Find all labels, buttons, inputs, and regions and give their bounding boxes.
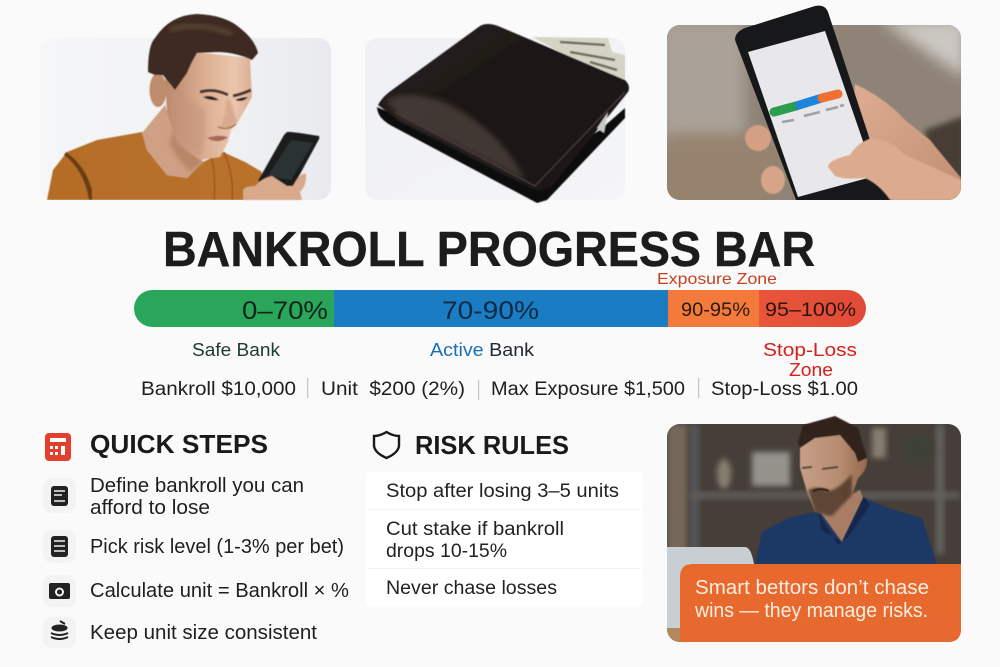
panel: risk rules list bbox=[366, 472, 643, 606]
callout: smart bettors: Smart bettors don’t chase bbox=[695, 577, 929, 599]
label: stop-loss zone: Stop-Loss bbox=[763, 340, 857, 360]
ear bbox=[150, 73, 166, 107]
step 2 bbox=[43, 530, 344, 563]
laptop bbox=[667, 547, 754, 628]
stats row: Bankroll $10,000 bbox=[141, 379, 296, 400]
neck bbox=[142, 105, 203, 178]
fingers and thumb bbox=[745, 125, 961, 200]
stats row: Unit $200 (2%) bbox=[321, 379, 465, 400]
photo: hand holding phone showing progress bar bbox=[660, 6, 965, 205]
step 3: Calculate unit = Bankroll × % bbox=[90, 580, 349, 602]
step 4: Keep unit size consistent bbox=[90, 622, 317, 644]
head of man at laptop bbox=[798, 416, 867, 516]
callout: smart bettors: wins — they manage risks. bbox=[694, 600, 928, 622]
segment: 70-90%: 70-90% bbox=[442, 297, 539, 325]
label: stop-loss zone: Zone bbox=[789, 360, 833, 380]
stats row bbox=[141, 378, 858, 400]
shirt bbox=[755, 497, 937, 564]
title: BANKROLL PROGRESS BAR bbox=[163, 223, 815, 277]
photo: man frowning at phone bbox=[40, 14, 331, 200]
rule 1: Stop after losing 3–5 units bbox=[386, 481, 619, 502]
phone in hand bbox=[243, 132, 319, 200]
photo: black leather wallet with cash bbox=[365, 24, 629, 203]
step 3 bbox=[43, 575, 349, 607]
hair bbox=[148, 14, 258, 90]
mini progress bar bbox=[774, 94, 844, 122]
icon: red calculator bbox=[45, 433, 71, 461]
hand behind phone bbox=[850, 84, 961, 200]
mouth bbox=[207, 136, 228, 141]
label: active bank: Active Bank bbox=[430, 340, 535, 360]
label: exposure zone: Exposure Zone bbox=[657, 271, 777, 288]
progress bar bbox=[134, 290, 866, 327]
neck bbox=[820, 490, 863, 542]
rule 2 bbox=[386, 519, 564, 562]
rule 3: Never chase losses bbox=[386, 578, 557, 599]
step 4 bbox=[43, 617, 317, 648]
step 1: afford to lose bbox=[90, 497, 210, 519]
callout: smart bettors bbox=[680, 564, 961, 642]
heading: risk rules: RISK RULES bbox=[415, 430, 569, 460]
label: safe bank: Safe Bank bbox=[192, 340, 281, 360]
stats row: Max Exposure $1,500 bbox=[491, 379, 685, 400]
nose shadow bbox=[220, 100, 237, 128]
step 1 bbox=[43, 475, 304, 519]
stats row: Stop-Loss $1.00 bbox=[711, 379, 858, 400]
face bbox=[165, 52, 252, 160]
photo: man at laptop with callout bbox=[667, 416, 961, 642]
orange t-shirt bbox=[47, 132, 262, 200]
rule 2: drops 10-15% bbox=[386, 541, 507, 562]
brows and eyes bbox=[200, 90, 251, 96]
icon: shield bbox=[374, 432, 399, 458]
phone body and screen bbox=[735, 6, 892, 200]
step 2: Pick risk level (1-3% per bet) bbox=[90, 536, 344, 558]
label: stop-loss zone bbox=[763, 340, 857, 380]
segment: 0-70%: 0–70% bbox=[242, 297, 328, 325]
heading: quick steps: QUICK STEPS bbox=[90, 429, 268, 459]
step 1: Define bankroll you can bbox=[90, 475, 304, 497]
rule 2: Cut stake if bankroll bbox=[386, 519, 564, 540]
segment: 90-95%: 90-95% bbox=[681, 300, 750, 321]
segment: 95-100%: 95–100% bbox=[765, 300, 856, 321]
